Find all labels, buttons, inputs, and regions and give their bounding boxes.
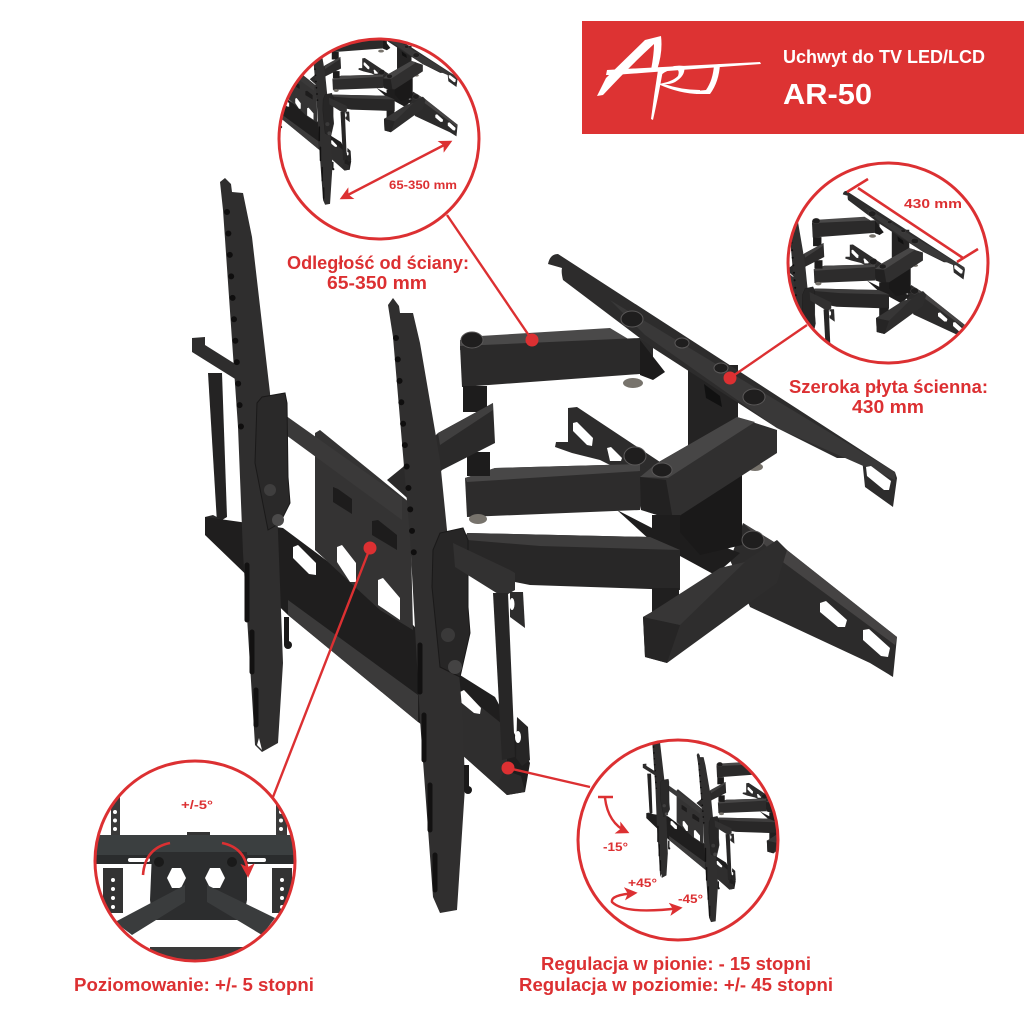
caption: tilt and swivel [519,954,833,995]
label: swivel plus: +45° [628,876,657,890]
left connecting arm [387,332,495,505]
rear view of mount [90,795,300,963]
callout circle: wall distance [278,38,480,240]
lower arm [455,515,680,618]
upper rear plate [555,407,660,480]
caption: wall plate [789,377,988,417]
mount thumbnail [642,743,776,922]
dot: bracket marker [502,762,514,774]
dot: arm marker [526,334,538,346]
label: swivel minus: -45° [678,892,703,906]
wall column [678,365,742,555]
caption: wall plate: Szeroka płyta ścienna: [789,377,988,397]
dimension line [847,179,978,262]
label: tilt angle: -15° [603,840,628,854]
middle arm [465,452,650,524]
callout circle: leveling [90,761,300,963]
callout circle: tilt and swivel [576,738,780,942]
right TV rail [284,298,472,913]
arrow: tilt [598,797,627,832]
lower wall plate [617,510,897,677]
connector: wall plate callout [730,325,807,378]
icon: ART logo [597,36,761,120]
measurement label: 65-350 mm [389,178,457,192]
dot: plate marker [364,542,376,554]
lower crossbar [205,517,530,795]
dot: wall plate marker [724,372,736,384]
caption: tilt and swivel: Regulacja w poziomie: +/- 45 stopni [519,975,833,995]
central plate [315,430,413,630]
subtitle: Uchwyt do TV LED/LCD [783,47,985,67]
measurement label: 430 mm [904,196,962,211]
connector: tilt callout [508,768,590,787]
connector: leveling callout [273,548,370,797]
caption: wall distance: Odległość od ściany: [287,253,469,273]
diagonal middle arm [624,417,777,520]
right tilt bracket and rod [432,528,525,760]
upper arm [460,328,665,412]
caption: leveling: Poziomowanie: +/- 5 stopni [74,975,314,995]
caption: wall distance: 65-350 mm [327,273,427,293]
upper crossbar [275,408,402,520]
left TV rail [220,178,283,752]
wall plate top [548,254,897,507]
arrows: leveling rotation [143,843,248,875]
left tilt bracket [255,393,290,530]
callout circle: wall plate width [786,162,990,364]
caption: tilt and swivel: Regulacja w pionie: - 15 stopni [541,954,811,974]
mount thumbnail [281,40,458,205]
main product: TV wall mount [192,178,897,913]
model name: AR-50 [783,79,872,111]
angle label: +/-5° [181,798,213,812]
caption: wall distance [287,253,469,293]
mount thumbnail [790,190,965,343]
connector: distance callout [447,215,532,340]
lower diagonal arm [643,531,787,663]
left rear bracket [192,337,270,570]
arrow: swivel [612,893,680,910]
arrow: distance [342,142,450,198]
panel: header banner [582,21,1024,134]
caption: wall plate: 430 mm [852,397,924,417]
